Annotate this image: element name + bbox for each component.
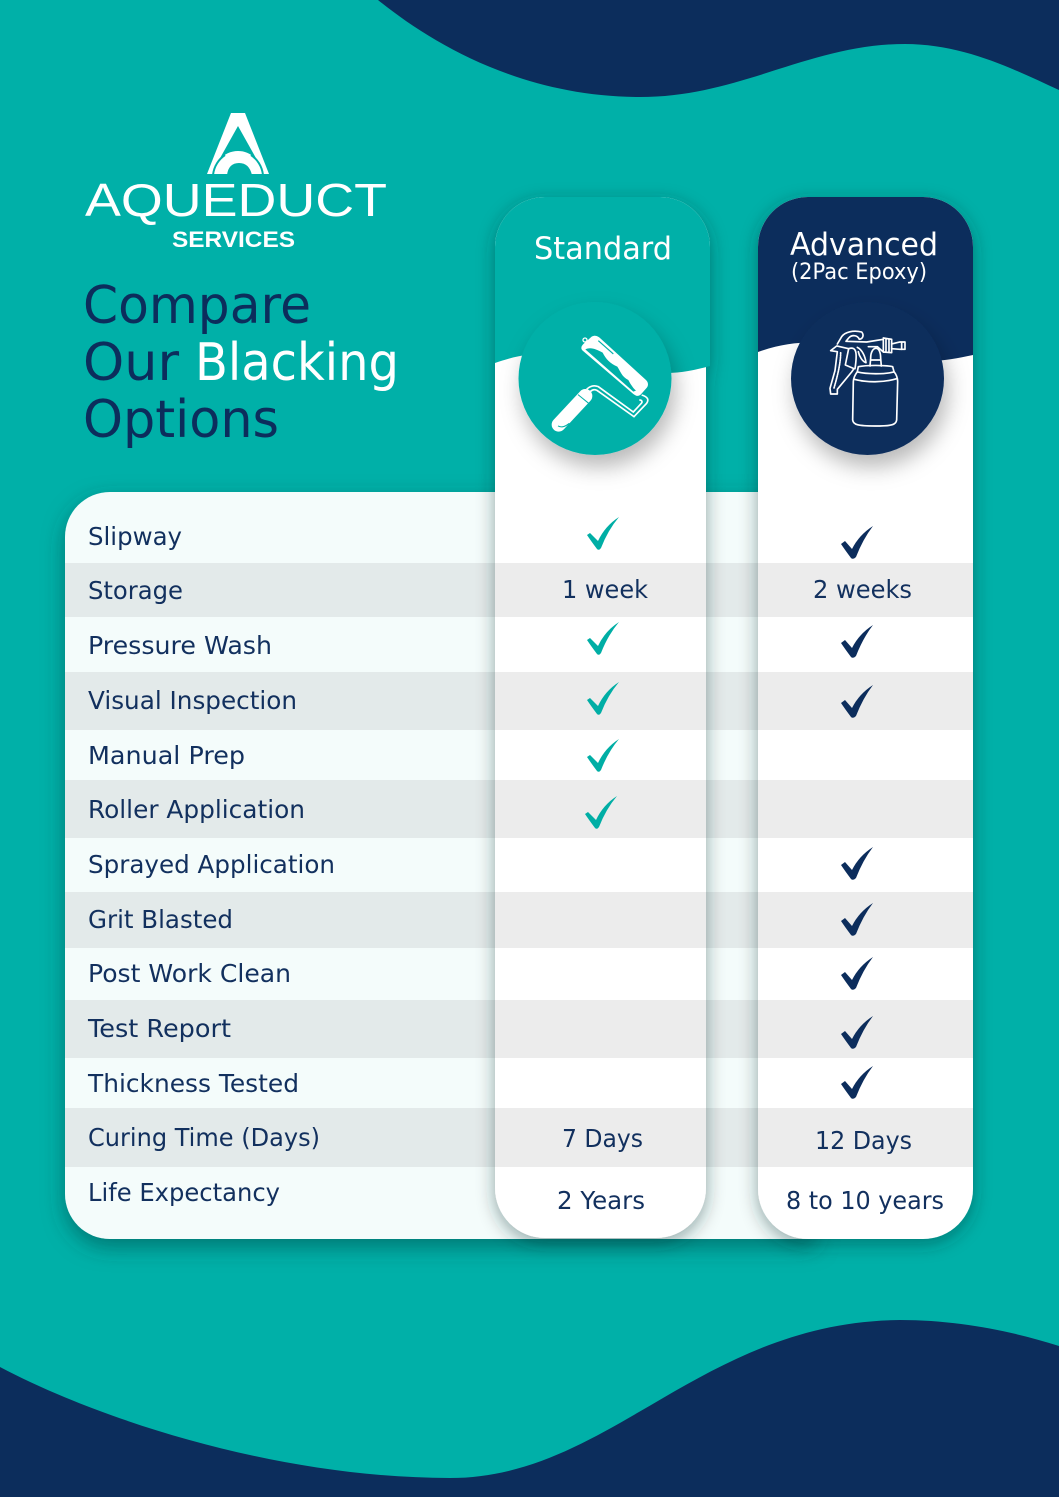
row labels: Visual Inspection	[88, 686, 297, 715]
row labels: Pressure Wash	[88, 631, 272, 660]
row labels: Test Report	[87, 1014, 231, 1043]
standard values and ticks: 7 Days	[562, 1124, 643, 1153]
bottom navy wave	[0, 1320, 1059, 1497]
standard heading: Standard	[534, 231, 672, 267]
comparison table background	[65, 492, 815, 1239]
advanced heading: Advanced	[790, 227, 938, 263]
advanced values and ticks: 8 to 10 years	[786, 1186, 944, 1215]
row labels: Curing Time (Days)	[88, 1123, 320, 1152]
row labels	[87, 522, 335, 1207]
standard header	[495, 197, 710, 373]
icon: paint roller	[518, 302, 672, 455]
icon: spray gun	[791, 302, 944, 455]
title: Blacking	[195, 333, 399, 393]
row labels: Storage	[88, 576, 183, 605]
row labels: Life Expectancy	[88, 1178, 280, 1207]
advanced column body	[758, 197, 973, 1239]
panel: standard column	[495, 197, 710, 1238]
standard column body	[495, 197, 710, 1238]
title: Our	[83, 333, 180, 393]
standard values and ticks	[557, 517, 648, 1215]
row labels: Slipway	[88, 522, 182, 551]
logo mark	[207, 113, 269, 175]
row labels: Sprayed Application	[88, 850, 335, 879]
advanced column rows	[758, 563, 973, 1167]
top navy wave	[378, 0, 1059, 97]
advanced header	[758, 197, 973, 361]
advanced values and ticks: 2 weeks	[813, 575, 912, 604]
row labels: Roller Application	[88, 795, 305, 824]
title: Options	[83, 390, 279, 450]
logo wordmark: AQUEDUCT	[85, 174, 387, 226]
title: Compare	[83, 276, 311, 336]
logo: Aqueduct Services	[85, 113, 387, 252]
standard column rows	[495, 563, 710, 1167]
title	[83, 276, 399, 450]
panel: advanced column	[758, 197, 973, 1239]
row labels: Thickness Tested	[87, 1069, 299, 1098]
row labels: Manual Prep	[88, 741, 245, 770]
row labels: Grit Blasted	[88, 905, 233, 934]
row labels: Post Work Clean	[88, 959, 291, 988]
advanced values and ticks: 12 Days	[815, 1126, 912, 1155]
standard values and ticks: 1 week	[562, 575, 648, 604]
logo services: SERVICES	[172, 227, 295, 252]
advanced subheading: (2Pac Epoxy)	[791, 260, 927, 285]
advanced values and ticks	[786, 526, 944, 1215]
standard values and ticks: 2 Years	[557, 1186, 645, 1215]
